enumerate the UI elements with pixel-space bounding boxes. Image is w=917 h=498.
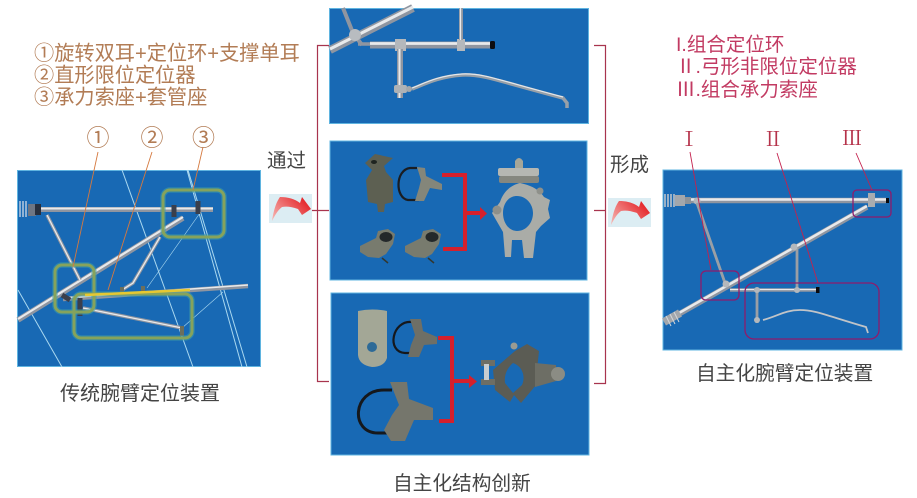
part: large u-bolt clamp	[358, 382, 433, 441]
hangers	[394, 8, 461, 98]
caption: independent device: 自主化腕臂定位装置	[696, 363, 873, 385]
left bracket	[312, 46, 329, 382]
top tube with insulator	[665, 193, 889, 207]
part: rotating lug	[365, 154, 393, 212]
part: combined ring	[492, 158, 550, 258]
heading: forming: 形成	[610, 154, 649, 176]
part: u-bolt clamp	[398, 167, 442, 201]
legend: traditional components: ①旋转双耳+定位环+支撑单耳	[34, 42, 300, 65]
horizontal tube	[343, 8, 495, 51]
legend: independent components: I.组合定位环	[676, 34, 784, 56]
legend: traditional components: ③承力索座+套管座	[34, 86, 207, 109]
lower tube and struts	[47, 201, 248, 336]
leader lines and roman labels	[679, 128, 872, 283]
bracket arrow	[438, 338, 472, 421]
legend: traditional components	[34, 42, 300, 109]
heading: through: 通过	[267, 150, 306, 172]
part: tube clamp right	[405, 229, 441, 263]
diagonal tube	[330, 7, 413, 50]
leader lines and circled labels	[73, 124, 215, 290]
arrow: through	[269, 194, 312, 223]
legend: independent components: Ⅱ.弓形非限位定位器	[676, 56, 857, 78]
legend: independent components: Ⅲ.组合承力索座	[676, 79, 818, 101]
leader lines and roman labels: Ⅰ	[679, 129, 699, 151]
legend: independent components	[676, 34, 857, 101]
part: small u-bolt clamp	[393, 319, 437, 357]
panel: independent cantilever device	[663, 170, 902, 350]
part: tube clamp left	[360, 229, 395, 263]
right bracket	[594, 46, 606, 384]
panel: traditional cantilever device	[18, 170, 260, 367]
diagonal tube with insulator	[664, 206, 867, 326]
panel: non-limit steady arm	[330, 7, 588, 124]
curved steady arm	[412, 74, 567, 108]
panel: combined messenger clamp parts	[331, 293, 589, 455]
struts and lower tube	[697, 203, 820, 323]
highlight frames	[55, 190, 224, 338]
leader lines and circled labels: ③	[192, 124, 215, 150]
bracket arrow	[442, 175, 482, 249]
diagonal tube	[18, 217, 183, 320]
curved steady arm	[763, 310, 868, 333]
part: plate lug	[358, 310, 387, 367]
legend: traditional components: ②直形限位定位器	[34, 64, 196, 87]
highlight frames	[701, 190, 891, 339]
leader lines and roman labels: Ⅱ	[763, 129, 783, 151]
part: combined clamp	[481, 342, 565, 403]
caption: innovation: 自主化结构创新	[393, 473, 531, 495]
leader lines and circled labels: ①	[86, 124, 110, 150]
panel: combined steady ring parts	[330, 141, 587, 280]
top tube with insulator	[20, 201, 213, 217]
caption: traditional device: 传统腕臂定位装置	[60, 382, 220, 405]
leader lines and circled labels: ②	[140, 124, 164, 150]
arrow: forming	[608, 198, 651, 227]
leader lines and roman labels: Ⅲ	[842, 128, 862, 150]
